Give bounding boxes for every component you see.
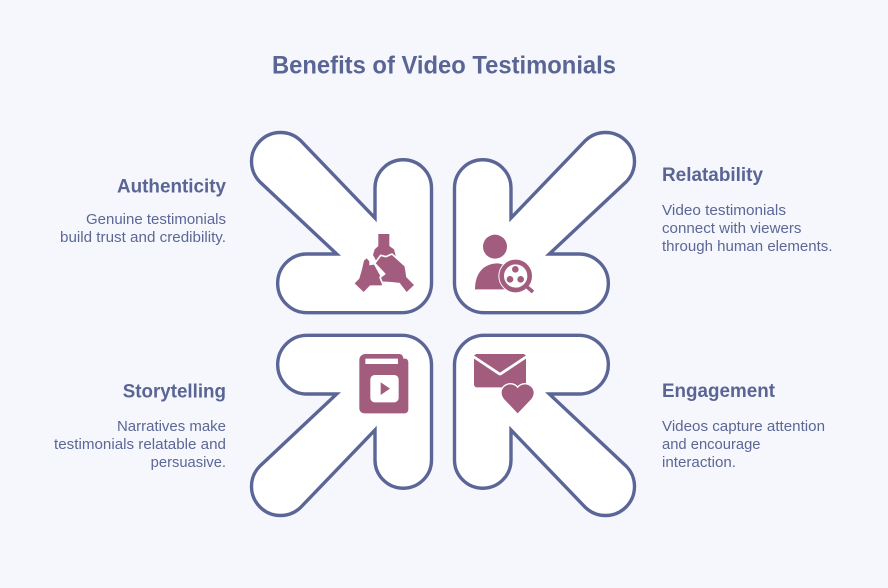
text block: engagement — [662, 380, 825, 471]
icon: envelope with heart — [474, 354, 534, 413]
text block: relatability: Video testimonials — [662, 203, 786, 219]
text block: storytelling: Narratives make — [117, 419, 226, 435]
text block: authenticity: build trust and credibility. — [60, 230, 226, 246]
text block: authenticity: Authenticity — [117, 176, 226, 198]
text block: engagement: interaction. — [662, 455, 736, 471]
text block: relatability: connect with viewers — [662, 221, 802, 237]
text block: engagement: and encourage — [662, 437, 760, 453]
text block: engagement: Engagement — [662, 380, 775, 402]
text block: engagement: Videos capture attention — [662, 419, 825, 435]
text block: authenticity — [60, 176, 226, 246]
text block: storytelling: testimonials relatable and — [54, 437, 226, 453]
arrow: top left — [251, 132, 432, 313]
text block: relatability: Relatability — [662, 164, 763, 186]
arrow: bottom right — [454, 335, 635, 516]
arrow: bottom left — [251, 335, 432, 516]
text block: relatability — [662, 164, 832, 255]
icon: joined hands — [355, 234, 415, 293]
text block: storytelling — [54, 380, 226, 471]
text block: storytelling: persuasive. — [151, 455, 226, 471]
title: Benefits of Video Testimonials — [272, 52, 616, 80]
arrow: top right — [454, 132, 635, 313]
text block: storytelling: Storytelling — [123, 380, 226, 402]
text block: authenticity: Genuine testimonials — [86, 212, 226, 228]
icon: person with film magnifier — [475, 235, 533, 293]
icon: video book — [359, 354, 408, 413]
text block: relatability: through human elements. — [662, 239, 832, 255]
